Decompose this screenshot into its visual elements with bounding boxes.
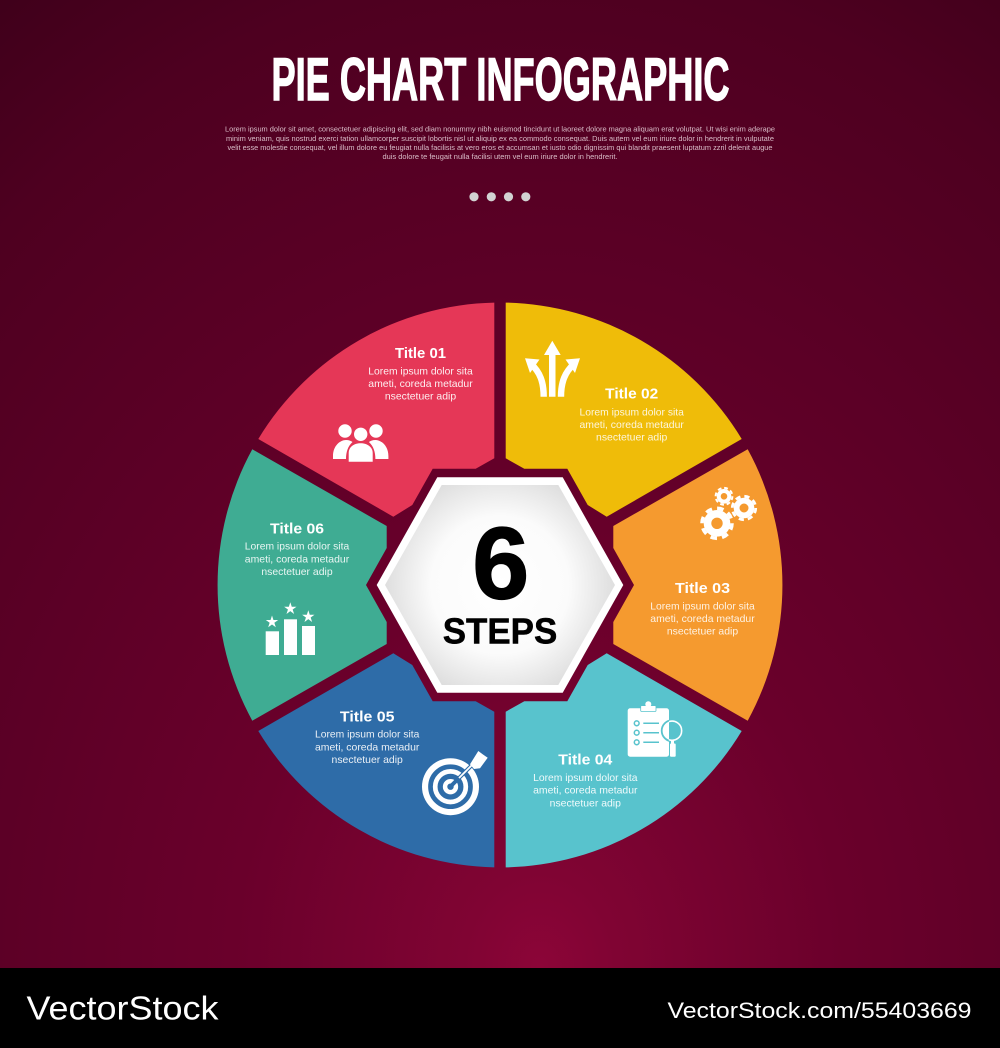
- heading: title 03: Title 03: [675, 580, 730, 597]
- panel: step 03: [613, 449, 782, 721]
- text: description 02: Lorem ipsum dolor sita: [580, 406, 684, 418]
- segment: red: [258, 303, 494, 517]
- text: description 04: [533, 772, 638, 809]
- text: description 02: [580, 406, 684, 444]
- panel: step 05: [258, 653, 494, 867]
- text: description 06: [245, 541, 350, 578]
- heading: title 06: Title 06: [270, 520, 324, 537]
- text: description 05: [315, 729, 420, 766]
- footer url text: VectorStock.com/55403669: [668, 998, 972, 1023]
- panel: step 06: [218, 449, 387, 721]
- text: description 05: ameti, coreda metadur: [315, 741, 420, 753]
- heading: title 04: Title 04: [558, 752, 613, 769]
- text: description 03: ameti, coreda metadur: [650, 613, 755, 625]
- segment: teal: [506, 653, 742, 867]
- heading: title 01: Title 01: [395, 345, 446, 362]
- segment: yellow: [506, 303, 742, 517]
- icon: diverging arrows: [525, 341, 580, 397]
- text: description 03: [650, 600, 755, 638]
- text: description 03: Lorem ipsum dolor sita: [650, 600, 755, 612]
- intro text block: Lorem ipsum dolor sit amet, consectetuer adipiscing elit, sed diam nonummy nibh euismod tincidunt ut laoreet dolore magna aliquam erat volutpat. Ut wisi enim aderape: [225, 124, 775, 134]
- centre hexagon: [377, 477, 623, 693]
- panel: step 01: [258, 303, 494, 517]
- text: description 04: ameti, coreda metadur: [533, 785, 638, 797]
- panel: step 04: [506, 653, 742, 867]
- text: description 06: ameti, coreda metadur: [245, 553, 350, 565]
- icon: people: [333, 424, 388, 462]
- heading: title 02: Title 02: [605, 386, 658, 403]
- text: description 05: Lorem ipsum dolor sita: [315, 729, 420, 741]
- intro text block: minim veniam, quis nostrud exerci tation ullamcorper suscipit lobortis nisl ut aliquip ex ea commodo consequat. Duis autem vel eum iriure dolor in hendrerit in vulputate: [226, 134, 774, 143]
- number 6: 6: [472, 506, 529, 620]
- heading: title 05: Title 05: [340, 708, 394, 725]
- pagination dots: [469, 192, 530, 201]
- text: description 01: nsectetuer adip: [385, 391, 456, 403]
- text: description 02: nsectetuer adip: [596, 432, 667, 444]
- text: description 04: nsectetuer adip: [550, 797, 621, 809]
- footer logo text: VectorStock: [26, 990, 219, 1027]
- intro text block: velit esse molestie consequat, vel illum dolore eu feugiat nulla facilisis at vero eros et accumsan et iusto odio dignissim qui blandit praesent luptatum zzril delenit augue: [228, 143, 772, 152]
- text: description 06: nsectetuer adip: [261, 566, 333, 578]
- label: steps: STEPS: [443, 611, 557, 652]
- icon: clipboard and magnifier: [628, 701, 683, 757]
- panel: step 02: [506, 303, 742, 517]
- text: description 04: Lorem ipsum dolor sita: [533, 772, 638, 784]
- intro text block: duis dolore te feugait nulla facilisi utem vel eum iriure dolor in hendrerit.: [382, 152, 618, 161]
- icon: gears: [702, 488, 756, 538]
- segment: orange: [613, 449, 782, 721]
- text: description 01: [368, 365, 473, 403]
- icon: bars with stars: [266, 602, 315, 655]
- text: description 03: nsectetuer adip: [667, 626, 738, 638]
- text: description 01: Lorem ipsum dolor sita: [368, 365, 473, 377]
- text: description 01: ameti, coreda metadur: [368, 378, 473, 390]
- text: description 02: ameti, coreda metadur: [580, 419, 684, 431]
- icon: target with dart: [422, 751, 488, 815]
- text: description 06: Lorem ipsum dolor sita: [245, 541, 349, 553]
- footer watermark bar: [0, 968, 1000, 1048]
- segment: green: [218, 449, 387, 721]
- text: description 05: nsectetuer adip: [332, 754, 403, 766]
- intro text block: [225, 124, 775, 161]
- segment: blue: [258, 653, 494, 867]
